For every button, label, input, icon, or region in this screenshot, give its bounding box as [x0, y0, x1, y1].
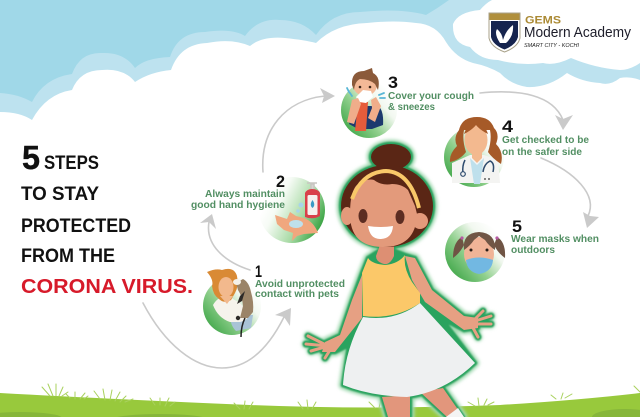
step 4: get checked — [444, 117, 589, 187]
label line 2: good hand hygiene — [191, 200, 285, 211]
step 2: hand hygiene — [191, 172, 325, 243]
title line: FROM THE: FROM THE — [21, 246, 115, 267]
number 5: 5 — [512, 217, 522, 236]
arrow: step 1 to step 2 — [200, 214, 250, 270]
pale cloud band — [0, 0, 640, 150]
girl right arm and hand — [405, 256, 491, 337]
arrow: step 3 to step 4 — [480, 92, 573, 130]
icon: school shield — [489, 13, 520, 52]
step 3: cover cough — [341, 68, 474, 138]
girl smile — [368, 226, 393, 239]
icon: woman holding cat — [203, 269, 261, 337]
number 4: 4 — [502, 117, 514, 136]
girl hair — [341, 165, 433, 247]
title line: STEPS: STEPS — [44, 153, 99, 174]
girl eyes — [358, 209, 404, 224]
icon: girl wearing blue mask — [445, 222, 505, 282]
girl ears — [341, 207, 428, 229]
number 2: 2 — [276, 172, 285, 191]
arrow: step 4 to step 5 — [541, 158, 599, 228]
icon: hand wash and soap bottle — [259, 177, 325, 243]
girl left arm and hand — [306, 275, 362, 358]
label: cover your cough and sneezes: Cover your cough — [388, 91, 474, 102]
logo: GEMS Modern Academy — [489, 13, 631, 52]
title line: TO STAY: TO STAY — [21, 184, 99, 205]
label: always maintain good hand hygiene: Always maintain — [205, 189, 285, 200]
arrow: title to step 1 — [143, 303, 291, 368]
label: wear masks when outdoors: Wear masks when — [511, 234, 599, 245]
step 1: pets — [203, 262, 345, 337]
number 3: 3 — [388, 73, 398, 92]
number 1: 1 — [255, 262, 262, 281]
label line 2: & sneezes — [388, 102, 435, 113]
girl green outline — [306, 144, 491, 417]
girl legs — [382, 388, 464, 417]
label line 2: on the safer side — [502, 147, 582, 158]
Smart City Kochi tagline: SMART CITY - KOCHI — [524, 43, 580, 49]
girl headband — [352, 171, 419, 208]
logo cloud white — [453, 0, 640, 70]
girl skirt — [343, 303, 475, 397]
title line: CORONA VIRUS: CORONA VIRUS. — [21, 275, 193, 298]
title — [21, 139, 193, 298]
girl face — [350, 180, 417, 247]
step 5: wear masks — [445, 217, 599, 282]
girl hair bun — [371, 144, 411, 170]
GEMS wordmark: GEMS — [525, 14, 561, 26]
icon: boy sneezing into tissue — [341, 68, 397, 138]
label line 2: outdoors — [511, 245, 555, 256]
girl pale glow outline — [306, 144, 491, 417]
ground: grass — [0, 384, 640, 417]
girl yellow top — [362, 255, 420, 317]
central girl illustration — [306, 144, 491, 417]
title line: PROTECTED: PROTECTED — [21, 216, 131, 237]
grass tufts — [42, 384, 640, 409]
title numeral 5: 5 — [22, 139, 40, 176]
label: get checked to be on the safer side: Get checked to be — [502, 135, 589, 146]
Modern Academy wordmark: Modern Academy — [524, 24, 631, 41]
label: avoid unprotected contact with pets: Avoid unprotected — [255, 279, 345, 290]
arrow: step 2 to step 3 — [263, 88, 335, 172]
label line 2: contact with pets — [255, 289, 339, 300]
icon: doctor with stethoscope — [444, 117, 504, 187]
girl neck — [376, 245, 394, 264]
